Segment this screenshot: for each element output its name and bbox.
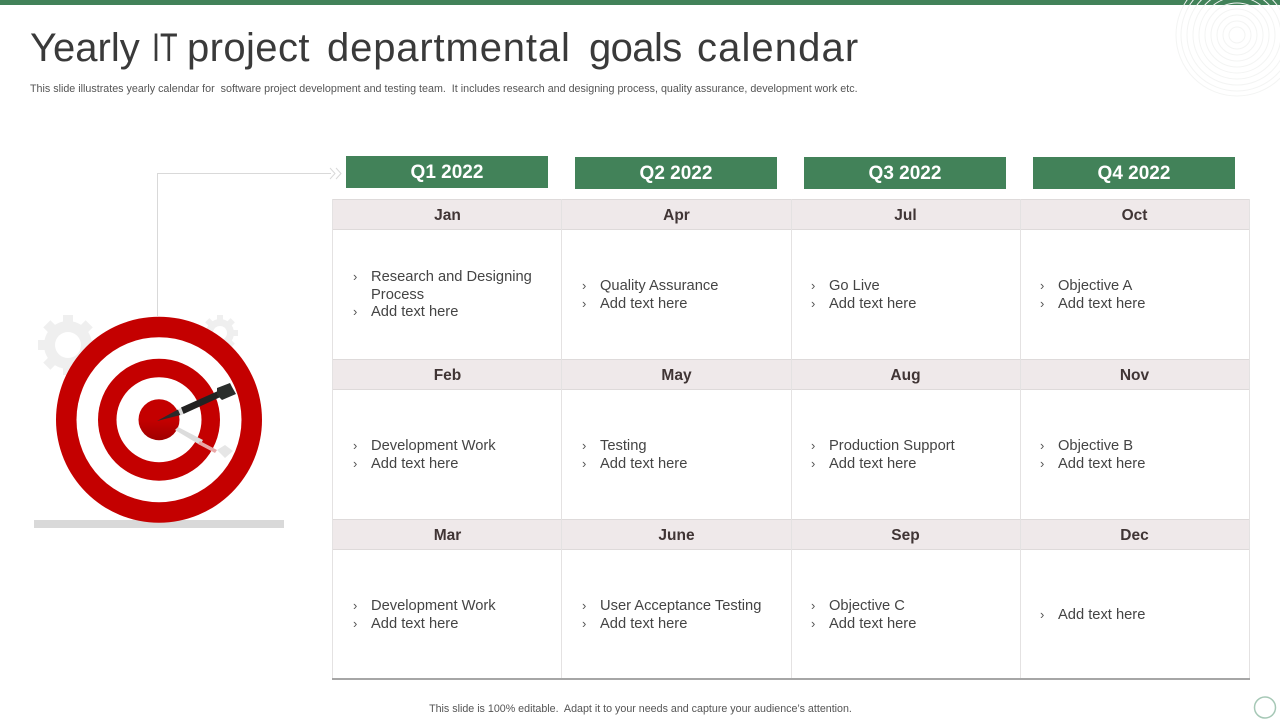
cell: Oct: › (1040, 278, 1044, 293)
title: Yearly (30, 26, 140, 70)
month: Aug: Aug (890, 367, 921, 384)
cell: Aug: Add text here (829, 456, 916, 472)
cell: Jul: Go Live (829, 278, 880, 294)
cell: Mar: › (353, 598, 357, 613)
cell: Apr: Add text here (600, 296, 687, 312)
month: Jan: Jan (434, 207, 461, 224)
cell: Aug (811, 438, 955, 472)
cell: Jul: › (811, 296, 815, 311)
target rings (56, 317, 262, 523)
cell: Oct (1040, 278, 1145, 312)
cell: May: › (582, 456, 586, 471)
cell: Apr: › (582, 278, 586, 293)
dart arrow (157, 383, 236, 421)
cell: Apr: › (582, 296, 586, 311)
cell: May: Add text here (600, 456, 687, 472)
cell: June: › (582, 598, 586, 613)
cell: May: › (582, 438, 586, 453)
month header band 1 (333, 199, 1250, 230)
icon: footer ring (1254, 696, 1276, 719)
cell: Feb: › (353, 438, 357, 453)
cell: Dec: Add text here (1058, 607, 1145, 623)
cell: Aug: Production Support (829, 438, 955, 454)
cell: Sep (811, 598, 916, 632)
cell: Feb: Add text here (371, 456, 458, 472)
cell: Sep: Add text here (829, 616, 916, 632)
month: Sep: Sep (891, 527, 920, 544)
month: Nov: Nov (1120, 367, 1149, 384)
Q4 header (1033, 157, 1235, 189)
arrow shadow (175, 427, 233, 458)
Q3 header: Q3 2022 (869, 163, 941, 184)
cell: Dec: › (1040, 607, 1044, 622)
subtitle: This slide illustrates yearly calendar for software project development and testing team. It includes research and designing process, quality assurance, development work etc. (30, 83, 858, 95)
month: June: June (658, 527, 695, 544)
title: project (187, 26, 310, 70)
title (30, 26, 859, 70)
cell: Nov: Objective B (1058, 438, 1133, 454)
cell: Oct: Objective A (1058, 278, 1132, 294)
cell: Jan: Process (371, 287, 424, 303)
ground shadow bar (34, 520, 284, 528)
cell: June (582, 598, 761, 632)
month: Dec: Dec (1120, 527, 1149, 544)
cell: Jul: Add text here (829, 296, 916, 312)
cell: Feb: Development Work (371, 438, 496, 454)
cell: Aug: › (811, 456, 815, 471)
cell: Nov: Add text here (1058, 456, 1145, 472)
Q1 header (346, 156, 548, 188)
Q3 header (804, 157, 1006, 189)
cell: June: › (582, 616, 586, 631)
cell: Sep: › (811, 598, 815, 613)
illustration: target with arrow (34, 315, 284, 528)
arrow: connector from target to Q1 (157, 168, 342, 316)
title: goals (589, 26, 682, 70)
cell: Jul: › (811, 278, 815, 293)
footer note: This slide is 100% editable. Adapt it to your needs and capture your audience’s attention. (429, 703, 852, 715)
month: Feb: Feb (434, 367, 461, 384)
cell: Mar: Add text here (371, 616, 458, 632)
cell: Nov: › (1040, 456, 1044, 471)
cell: Feb: › (353, 456, 357, 471)
cell: Jan: › (353, 269, 357, 284)
Q4 header: Q4 2022 (1098, 163, 1170, 184)
cell: Nov (1040, 438, 1145, 472)
cell: Sep: › (811, 616, 815, 631)
month: Oct: Oct (1122, 207, 1147, 224)
cell: Mar: › (353, 616, 357, 631)
cell: Aug: › (811, 438, 815, 453)
cell: Feb (353, 438, 496, 472)
cell: June: Add text here (600, 616, 687, 632)
Q1 header: Q1 2022 (411, 162, 483, 183)
cell: Jan: Add text here (371, 304, 458, 320)
title: IT (152, 26, 178, 70)
cell: Apr (582, 278, 718, 312)
cell: Jan (353, 269, 532, 320)
decorative concentric rings (1176, 0, 1280, 96)
top green bar (0, 0, 1280, 5)
month: Mar: Mar (434, 527, 461, 544)
cell: Oct: › (1040, 296, 1044, 311)
Q2 header (575, 157, 777, 189)
cell: June: User Acceptance Testing (600, 598, 761, 614)
cell: Jul (811, 278, 916, 312)
title: calendar (697, 26, 859, 70)
month: Apr: Apr (663, 207, 690, 224)
month: Jul: Jul (894, 207, 917, 224)
cell: Jan: Research and Designing (371, 269, 532, 285)
cell: Apr: Quality Assurance (600, 278, 718, 294)
cell: Jan: › (353, 304, 357, 319)
month: May: May (661, 367, 692, 384)
icon: right gear (202, 315, 238, 351)
cell: Nov: › (1040, 438, 1044, 453)
Q2 header: Q2 2022 (640, 163, 712, 184)
cell: May (582, 438, 687, 472)
cell: Sep: Objective C (829, 598, 905, 614)
cell: Mar (353, 598, 496, 632)
cell: Oct: Add text here (1058, 296, 1145, 312)
month header band 2 (333, 359, 1250, 390)
month header band 3 (333, 519, 1250, 550)
cell: May: Testing (600, 438, 647, 454)
title: departmental (327, 26, 571, 70)
cell: Mar: Development Work (371, 598, 496, 614)
icon: left gear (38, 315, 98, 375)
